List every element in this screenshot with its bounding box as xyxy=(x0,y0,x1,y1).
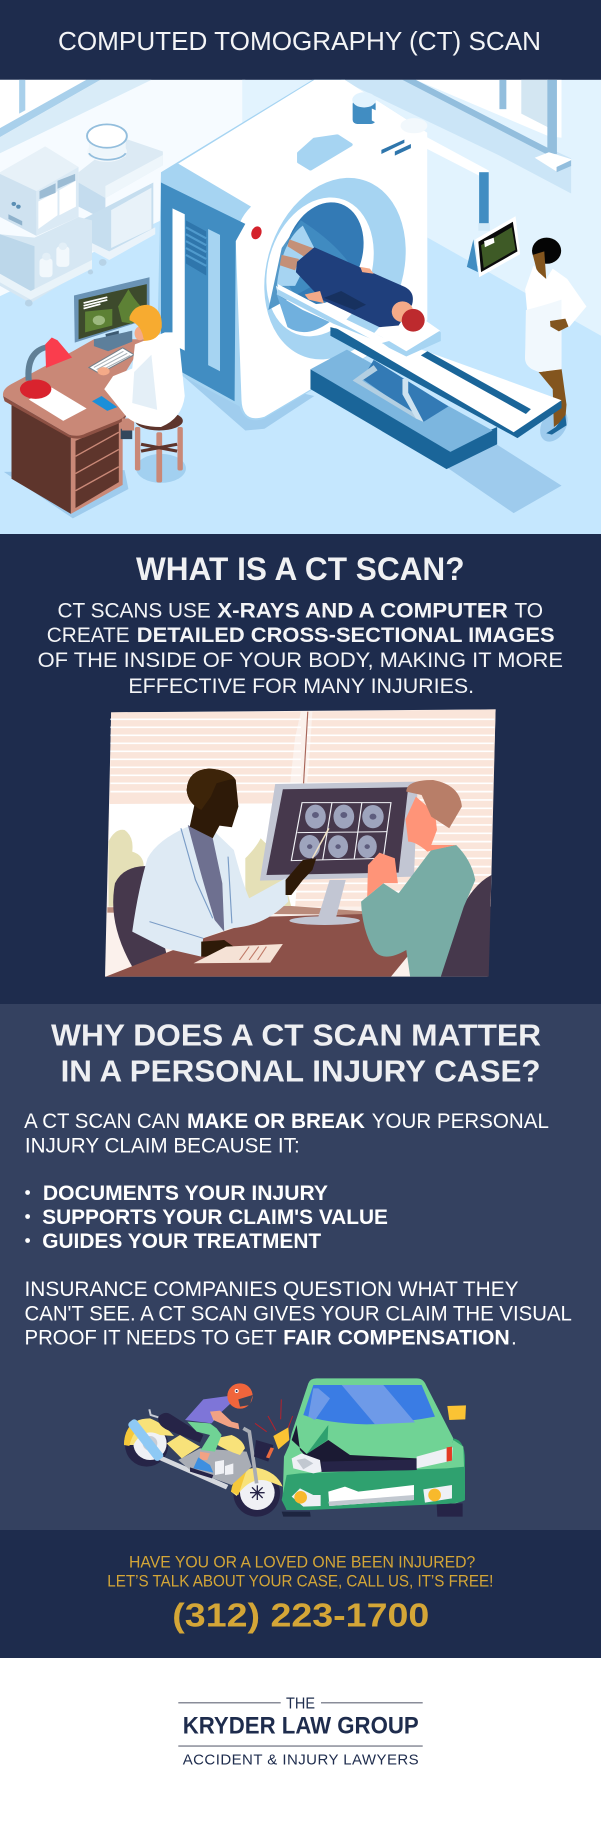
insurance paragraph: CAN'T SEE. A CT SCAN GIVES YOUR CLAIM THE VISUAL xyxy=(24,1302,572,1325)
doctor standing xyxy=(525,238,586,446)
bullet list: SUPPORTS YOUR CLAIM'S VALUE xyxy=(42,1206,388,1229)
heading: IN A PERSONAL INJURY CASE? xyxy=(61,1054,541,1089)
section: why a CT scan matters xyxy=(0,1004,601,1530)
impact marks and broken mirror xyxy=(255,1399,293,1449)
heading: WHAT IS A CT SCAN? xyxy=(136,551,464,587)
claim paragraph xyxy=(24,1110,549,1157)
call to action band xyxy=(0,1530,601,1658)
call to action text: HAVE YOU OR A LOVED ONE BEEN INJURED? xyxy=(129,1552,475,1571)
intro paragraph: OF THE INSIDE OF YOUR BODY, MAKING IT MORE xyxy=(38,648,563,672)
illustration: doctor reviewing brain scans with patient xyxy=(105,709,496,977)
intro paragraph xyxy=(38,598,563,698)
phone number: (312) 223-1700 xyxy=(172,1597,429,1634)
bullet list: DOCUMENTS YOUR INJURY xyxy=(43,1182,328,1205)
intro paragraph: CREATE xyxy=(47,623,130,647)
bullet list xyxy=(25,1182,388,1253)
claim paragraph: MAKE OR BREAK xyxy=(187,1110,365,1133)
header band xyxy=(0,0,601,80)
claim paragraph: INJURY CLAIM BECAUSE IT: xyxy=(25,1134,300,1157)
desk with lamp, monitor and phone xyxy=(3,277,149,518)
logo: The Kryder Law Group: KRYDER LAW GROUP xyxy=(183,1712,419,1739)
insurance paragraph: PROOF IT NEEDS TO GET xyxy=(24,1326,277,1349)
call to action text xyxy=(107,1552,493,1591)
logo: The Kryder Law Group: ACCIDENT & INJURY LAWYERS xyxy=(183,1752,419,1769)
call to action text: LET’S TALK ABOUT YOUR CASE, CALL US, IT’S FREE! xyxy=(107,1572,493,1591)
rider xyxy=(185,1383,253,1478)
patient xyxy=(361,780,491,977)
shelf cart xyxy=(0,124,163,307)
logo: The Kryder Law Group xyxy=(178,1695,423,1769)
claim paragraph: YOUR PERSONAL xyxy=(372,1110,549,1133)
doctor xyxy=(132,769,329,963)
CT machine xyxy=(157,80,427,431)
intro paragraph: EFFECTIVE FOR MANY INJURIES. xyxy=(128,674,474,698)
insurance paragraph: INSURANCE COMPANIES QUESTION WHAT THEY xyxy=(24,1278,519,1301)
section: what is a CT scan xyxy=(0,534,601,1004)
logo: The Kryder Law Group: THE xyxy=(286,1695,315,1712)
insurance paragraph: . xyxy=(511,1326,517,1349)
intro paragraph: DETAILED CROSS-SECTIONAL IMAGES xyxy=(137,623,555,647)
heading xyxy=(51,1018,541,1089)
title: COMPUTED TOMOGRAPHY (CT) SCAN xyxy=(58,26,541,56)
illustration: CT scanner room xyxy=(0,80,601,535)
claim paragraph: A CT SCAN CAN xyxy=(24,1110,180,1133)
illustration: motorcycle and car collision xyxy=(124,1378,466,1517)
motorcycle xyxy=(124,1409,283,1517)
insurance paragraph: FAIR COMPENSATION xyxy=(283,1326,510,1349)
insurance paragraph xyxy=(24,1278,572,1349)
intro paragraph: CT SCANS USE xyxy=(58,598,211,622)
car xyxy=(282,1378,466,1517)
seated technician on stool xyxy=(97,305,186,483)
heading: WHY DOES A CT SCAN MATTER xyxy=(51,1018,541,1053)
bullet list: GUIDES YOUR TREATMENT xyxy=(42,1230,321,1253)
patient on table xyxy=(280,239,425,332)
intro paragraph: TO xyxy=(514,598,543,622)
CT table and base xyxy=(277,284,562,513)
ceiling arm with screen xyxy=(352,92,520,277)
intro paragraph: X-RAYS AND A COMPUTER xyxy=(217,598,508,622)
